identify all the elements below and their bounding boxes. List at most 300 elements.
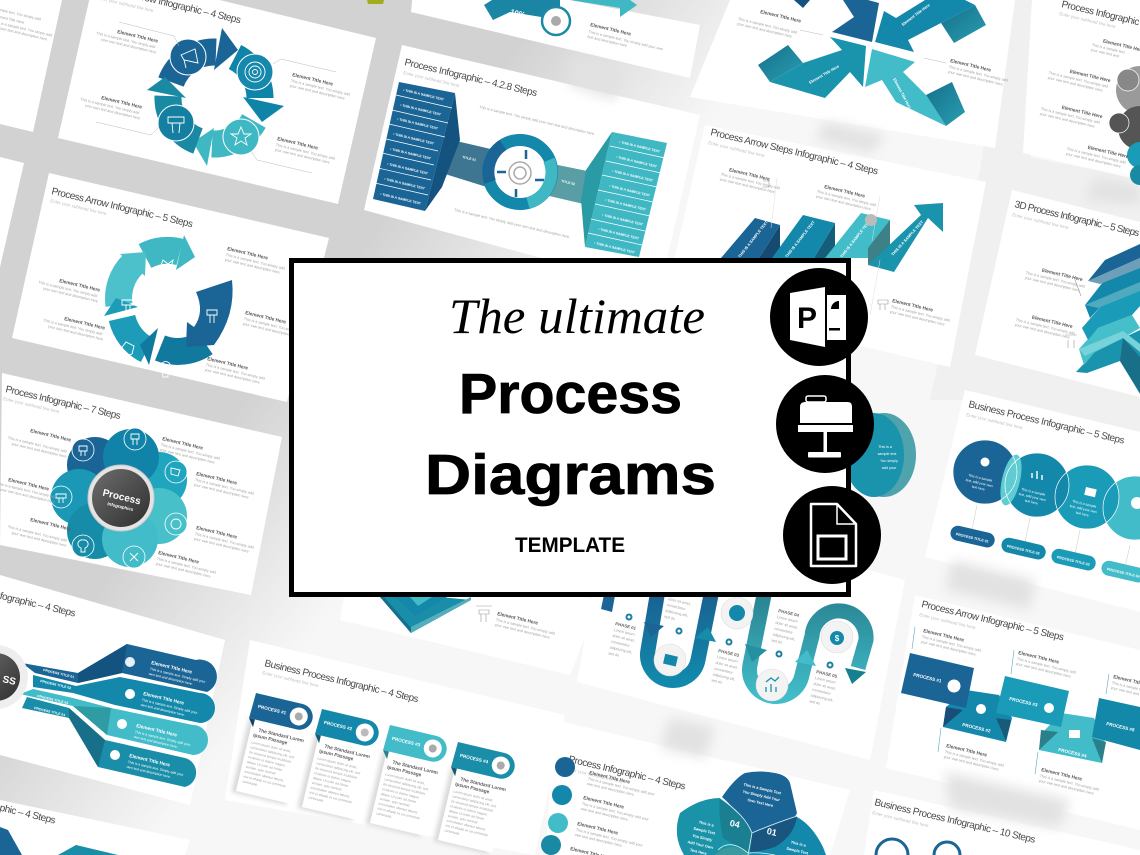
slide: 7 steps flower: This is a sample text. You simply add bbox=[7, 525, 67, 543]
captions: your own text and description here bbox=[920, 640, 976, 657]
slide: winding phases: sed do bbox=[664, 615, 675, 621]
slide: top right bbox=[1039, 0, 1140, 185]
slide: top right: Element Title Here bbox=[1069, 69, 1111, 84]
slide: winding phases: adipiscing elit, bbox=[665, 609, 688, 618]
slide: 7 steps flower: Element Title Here bbox=[8, 477, 50, 493]
slide: 3D chevrons: Element Title Here bbox=[1041, 268, 1083, 283]
pyramid fragment: Element Title Here bbox=[497, 611, 539, 627]
slide: 5 steps arrow ring: This is a sample text. You simply add bbox=[225, 253, 285, 271]
phase labels: consectetur bbox=[611, 640, 631, 648]
slide: 4.2.8 steps: • THIS IS A SAMPLE TEXT bbox=[384, 177, 426, 191]
slide: top right: your own text and description here bbox=[1047, 76, 1103, 93]
ring arrows bbox=[147, 28, 284, 166]
column 2: consequat. bbox=[308, 795, 325, 803]
slide: 4.2.8 steps: • THIS IS A SAMPLE TEXT bbox=[609, 184, 651, 198]
column 4: do eiusmod tempor incididunt bbox=[451, 799, 494, 813]
slide: process arrow 5 boxes: Process Arrow Infographic – 5 Steps bbox=[920, 599, 1065, 644]
petal icons bbox=[50, 428, 187, 568]
column 1: The Standard Lorem bbox=[258, 728, 305, 744]
slide: 5 steps arrow ring: This is a sample text. You simply add bbox=[205, 363, 265, 381]
slide: top right: Element Title Here bbox=[1087, 145, 1129, 160]
captions bbox=[920, 628, 983, 658]
title: Process Arrow Infographic – 5 Steps bbox=[50, 186, 194, 230]
slide: business 5 steps circles: text here bbox=[1075, 511, 1089, 518]
column 2 bbox=[298, 709, 381, 822]
slide: process arrow 5 boxes: PROCESS #3 bbox=[1009, 696, 1038, 708]
slide: 4.2.8 steps: • THIS IS A SAMPLE TEXT bbox=[594, 241, 636, 255]
slide: blob process: Sample Text bbox=[693, 827, 716, 836]
slide: 5 steps arrow ring: Enter your subhead line here bbox=[50, 198, 108, 216]
disk behind panel: You simply bbox=[880, 459, 898, 463]
captions bbox=[95, 25, 159, 54]
title: Process Infographic – 4.2.8 Steps bbox=[403, 57, 538, 99]
slide: winding phases: dolor sit amet, bbox=[775, 621, 798, 630]
band icons bbox=[125, 657, 135, 667]
slide: funnel 4 steps: This is a sample text. Simply add your bbox=[127, 760, 185, 777]
slide: winding phases bbox=[601, 590, 866, 708]
slide: top arrow with 10% bbox=[484, 0, 665, 56]
title: Process Infographic – 7 Steps bbox=[4, 384, 122, 422]
slide: blob process: Element Title Here bbox=[589, 770, 631, 786]
slide: 5 steps arrow ring bbox=[37, 186, 305, 386]
title pills: PROCESS TITLE 03 bbox=[1056, 555, 1090, 567]
slide: 7 steps flower: Enter your subhead line here bbox=[3, 396, 61, 414]
column 2: aliqua. Ut enim ad minim bbox=[312, 776, 349, 788]
notes: This is a sample text. You simply add your own text and description here. bbox=[479, 105, 595, 136]
slide: blob process: This is a bbox=[698, 820, 715, 828]
slide: process arrow 5 boxes: PROCESS #4 bbox=[1058, 747, 1087, 759]
slide: 4 steps ring: Element Title Here bbox=[101, 95, 143, 111]
band labels bbox=[34, 668, 75, 717]
band labels: PROCESS TITLE 02 bbox=[40, 679, 72, 690]
slide: 4 steps ring: This is a sample text. You simply add bbox=[80, 97, 140, 115]
captions: your own text and description here bbox=[101, 38, 156, 54]
slide: 7 steps flower: your own text and description here bbox=[11, 442, 67, 459]
slide: funnel 4 steps: Element Title Here bbox=[151, 660, 193, 676]
slide: blob process bbox=[541, 754, 826, 855]
slide: top right: This is a sample text. You simply add bbox=[1048, 71, 1108, 89]
slide: arrow steps: your own text and description here bbox=[815, 194, 871, 211]
slide: winding phases: $ bbox=[835, 634, 840, 643]
captions: This is a sample text. You simply add bbox=[921, 635, 981, 653]
column 1: veniam, quis nostrud bbox=[245, 765, 276, 776]
slide: winding phases: sed do bbox=[771, 638, 783, 645]
column 4: veniam, quis nostrud bbox=[447, 814, 478, 825]
slide: 7 steps flower: This is a sample text. You simply add bbox=[194, 532, 254, 550]
ring bbox=[104, 235, 233, 365]
band labels: PROCESS TITLE 04 bbox=[34, 706, 66, 717]
captions: This is a sample text. You simply add bbox=[38, 280, 98, 298]
bar labels: TITLE 01 bbox=[462, 155, 477, 162]
slide: 5 steps arrow ring: Element Title Here bbox=[245, 310, 287, 326]
slide: business 5 steps circles: text, add your own bbox=[1018, 492, 1046, 502]
slide: winding phases: dolor sit amet, bbox=[715, 661, 738, 670]
slide: 5 steps arrow ring: your own text and description here bbox=[48, 325, 103, 341]
slide: funnel 4 steps: SS bbox=[1, 674, 17, 688]
phase labels bbox=[608, 621, 638, 660]
central title panel bbox=[292, 260, 848, 594]
band labels: PROCESS TITLE 03 bbox=[37, 694, 69, 705]
slide: top arrow with 10%: text and description here bbox=[587, 35, 627, 48]
slide: 3D chevrons: Element Title Here bbox=[1031, 315, 1073, 330]
slide: 4.2.8 steps: • THIS IS A SAMPLE TEXT bbox=[390, 147, 432, 161]
column 4: nisi ut aliquip ex ea commodo bbox=[445, 823, 488, 837]
column 3: The Standard Lorem bbox=[392, 760, 439, 776]
slide: 3D chevrons: Enter your subhead line here bbox=[1012, 212, 1070, 230]
petals bbox=[67, 437, 123, 493]
slide: 4 steps ring: This is a sample text. You simply add bbox=[290, 79, 350, 97]
slide: 5 steps arrow ring: Element Title Here bbox=[227, 246, 269, 262]
slide: 7 steps flower: your own text and description here bbox=[193, 537, 249, 554]
pyramid fragment: This is a sample text. You simply add bbox=[495, 618, 555, 636]
slide: 5 steps arrow ring: This is a sample text. You simply add bbox=[43, 318, 103, 336]
slide: winding phases: PHASE 04 bbox=[778, 608, 800, 618]
slide: top right: This is a sample text. You simply add bbox=[1066, 147, 1126, 165]
slide: 3D chevrons: your own text and description here bbox=[1014, 323, 1070, 340]
rising bars bbox=[759, 225, 780, 258]
captions bbox=[719, 166, 782, 195]
step bubbles bbox=[654, 597, 853, 701]
slide: process arrow 5 boxes: This is a sample text. You simply add bbox=[944, 750, 1004, 768]
captions: Element Title Here bbox=[117, 29, 159, 45]
slide: cross arrows: Element Title Here bbox=[892, 77, 913, 110]
slide: process arrow 5 boxes: Element Title Here bbox=[1018, 650, 1060, 666]
slide: blob process: Add Your Own bbox=[687, 840, 714, 850]
slide: arrow steps: This is a sample text. You simply add bbox=[890, 305, 950, 323]
captions bbox=[37, 274, 101, 303]
path arrowheads bbox=[644, 622, 664, 637]
slide: blob process: Element Title Here bbox=[577, 821, 619, 837]
slide: blob process: This is a sample text. You simply add your bbox=[581, 802, 650, 822]
slide: winding phases: adipiscing elit, bbox=[712, 672, 736, 682]
captions: This is a sample text. You simply add bbox=[96, 31, 156, 49]
centre badge: Infographics bbox=[107, 501, 134, 512]
slide: process arrow 5 boxes: PROCESS #1 bbox=[913, 672, 942, 684]
slide: bottom left 4 steps bbox=[0, 788, 118, 855]
column 1: Lorem ipsum dolor sit amet, bbox=[251, 740, 292, 754]
column 1 bbox=[232, 693, 315, 806]
pyramid fragment bbox=[380, 597, 557, 641]
column 3: ut labore et dolore magna bbox=[382, 787, 419, 800]
slide: 4.2.8 steps: • THIS IS A SAMPLE TEXT bbox=[605, 198, 647, 212]
slide: blob process: This is a bbox=[790, 840, 807, 848]
slide: 7 steps flower: your own text and description here bbox=[159, 448, 215, 465]
slide: cross arrows bbox=[736, 0, 1010, 126]
column 1: Ipsum Passage bbox=[252, 733, 288, 747]
slide: winding phases: consectetur bbox=[774, 627, 794, 635]
slide: business 5 steps circles: text, add your own bbox=[965, 478, 993, 488]
slide: winding phases: adipiscing elit, bbox=[772, 632, 796, 642]
slide: 4.2.8 steps: • THIS IS A SAMPLE TEXT bbox=[393, 132, 435, 146]
title pills: PROCESS TITLE 02 bbox=[1006, 544, 1040, 556]
slide: arrow steps: Element Title Here bbox=[892, 298, 934, 314]
slide: 4 steps ring: your own text and description here bbox=[85, 104, 140, 120]
slide: 7 steps flower: This is a sample text. You simply add bbox=[7, 436, 67, 454]
connecting bars bbox=[445, 140, 495, 188]
phase labels: sed do bbox=[608, 651, 620, 658]
slide: top arrow with 10%: Element Title Here bbox=[590, 22, 632, 38]
slide: blob process: own text and description here. bbox=[586, 782, 635, 797]
column 2: PROCESS #2 bbox=[323, 720, 353, 731]
slide: business 5 steps circles bbox=[949, 399, 1140, 584]
ring icons bbox=[120, 260, 217, 377]
icon: Google Slides bbox=[783, 486, 881, 584]
title pills: PROCESS TITLE 01 bbox=[955, 532, 989, 544]
slide: 4.2.8 steps: • THIS IS A SAMPLE TEXT bbox=[387, 162, 429, 176]
phase labels: adipiscing elit, bbox=[609, 645, 633, 655]
column 3: consectetur adipiscing elit, sed bbox=[384, 777, 429, 791]
slide: 7 steps flower: Element Title Here bbox=[162, 436, 204, 452]
slide: funnel 4 steps: This is a sample text. Simply add your bbox=[149, 667, 207, 684]
slide: winding phases: Lorem ipsum bbox=[716, 655, 738, 664]
column 3: Ipsum Passage bbox=[386, 765, 422, 779]
column 2: do eiusmod tempor incididunt bbox=[315, 766, 358, 780]
script heading: The ultimate bbox=[449, 288, 705, 344]
slide: blob process: You Simply Add Your bbox=[742, 790, 781, 802]
slide: 7 steps flower: your own text and description here bbox=[0, 487, 55, 504]
slide: 5 steps arrow ring: your own text and description here bbox=[242, 322, 298, 339]
slide: arrow steps: This is a sample text. You simply add bbox=[817, 190, 876, 207]
slide: winding phases: Lorem ipsum bbox=[776, 615, 798, 624]
slide: funnel 4 steps: own text and description here. bbox=[148, 672, 193, 686]
top yellow fragment bbox=[367, 0, 384, 4]
slide: blob process: Element Title Here bbox=[583, 795, 625, 811]
column 2: The Standard Lorem bbox=[324, 744, 371, 760]
slide: top right: This is a sample text. You simply add bbox=[1040, 107, 1100, 125]
markers bbox=[626, 614, 832, 668]
slide: process arrow 5 boxes: This is a sample text. You simply add bbox=[1039, 774, 1099, 792]
column 2: nisi ut aliquip ex ea commodo bbox=[309, 790, 352, 804]
slide: 7 steps flower: Element Title Here bbox=[30, 517, 72, 533]
slide: 5 steps arrow ring: Element Title Here bbox=[207, 356, 249, 372]
slide: business 10 steps: Business Process Infographic – 10 Steps bbox=[873, 797, 1036, 846]
main heading line 1: Process bbox=[459, 362, 682, 426]
slide: cross arrows: This is a sample text. You simply add bbox=[948, 65, 1008, 83]
slide: cross arrows: your own text and description here bbox=[736, 22, 792, 39]
slide: cross arrows: Element Title Here bbox=[760, 9, 802, 25]
slide: arrow steps: Enter your subhead line here bbox=[708, 140, 766, 158]
slide: blob process: This is a sample text. You simply add your bbox=[587, 777, 656, 797]
disk behind panel: add your bbox=[882, 466, 897, 470]
column 4: Lorem ipsum dolor sit amet, bbox=[453, 789, 494, 803]
phase labels: PHASE 01 bbox=[615, 621, 637, 631]
slide: arrow steps: THIS IS A SAMPLE TEXT bbox=[890, 219, 925, 257]
slide: winding phases: dolor sit amet, bbox=[668, 597, 691, 606]
column 2: Lorem ipsum dolor sit amet, bbox=[317, 756, 358, 770]
slide: 7 steps flower: This is a sample text. You simply add bbox=[194, 478, 254, 496]
slide: arrow steps: THIS IS A SAMPLE TEXT bbox=[737, 219, 769, 259]
title pills bbox=[949, 524, 1140, 584]
slide: 3D chevrons: your own text and description here bbox=[1024, 276, 1080, 293]
slide: business 4 steps: Enter your subhead line here bbox=[262, 670, 320, 688]
column 3: Lorem ipsum dolor sit amet, bbox=[385, 772, 426, 786]
column 4 bbox=[434, 742, 517, 855]
slide: winding phases: consectetur bbox=[812, 688, 832, 696]
column 4: ut labore et dolore magna bbox=[450, 804, 487, 817]
slide: 4.2.8 steps: This is a sample text. You simply add your own text and description here. bbox=[454, 208, 570, 239]
icon circles bbox=[158, 39, 273, 155]
slide: 4 steps ring: your own text and description here bbox=[274, 148, 330, 165]
right panel bbox=[581, 132, 612, 247]
disk behind panel: sample text bbox=[878, 452, 896, 456]
column 1: consectetur adipiscing elit, sed bbox=[250, 745, 295, 759]
column 4: consectetur adipiscing elit, sed bbox=[452, 794, 497, 808]
column 4: Ipsum Passage bbox=[454, 782, 490, 796]
slide: 4 steps ring: Element Title Here bbox=[292, 72, 334, 88]
captions: your own text and description here bbox=[43, 287, 98, 303]
slide: blob process: This is a sample text. You simply add your bbox=[575, 828, 644, 848]
slide: 4.2.8 steps: • THIS IS A SAMPLE TEXT bbox=[403, 88, 445, 102]
slide: blob process: Process Infographic – 4 Steps bbox=[567, 754, 687, 793]
centre badge: Process bbox=[101, 488, 142, 507]
boxes bbox=[943, 690, 1012, 742]
captions: Element Title Here bbox=[30, 428, 72, 444]
main heading line 2: Diagrams bbox=[425, 443, 716, 507]
slide: process arrow 5 boxes: your own text and bbox=[1110, 686, 1139, 696]
slide: business 5 steps circles: Enter your subhead line here bbox=[966, 412, 1024, 430]
winding road bbox=[648, 590, 712, 680]
slide: blob process: 04 bbox=[729, 818, 741, 830]
disk behind panel bbox=[844, 413, 916, 497]
icon: Keynote bbox=[776, 375, 874, 473]
slide: arrow steps: THIS IS A SAMPLE TEXT bbox=[784, 219, 816, 259]
slide: top right: your own text and description here bbox=[1065, 152, 1121, 169]
slide: process arrow 5 boxes: Element Title Here bbox=[1041, 767, 1083, 783]
disk behind panel: This is a bbox=[878, 445, 893, 449]
slide: 7 steps flower: This is a sample text. You simply add bbox=[160, 443, 220, 461]
left panel bbox=[425, 93, 460, 211]
slide: funnel 4 steps: own text and description here. bbox=[133, 735, 178, 749]
column 2: consectetur adipiscing elit, sed bbox=[316, 761, 361, 775]
slide: funnel 4 steps: Element Title Here bbox=[136, 723, 178, 739]
slide: top right: your own text and bbox=[1090, 48, 1119, 58]
column 3 bbox=[366, 725, 449, 838]
slide: 4.2.8 steps: • THIS IS A SAMPLE TEXT bbox=[616, 155, 658, 169]
column 1: exercitation ullamco laboris bbox=[244, 770, 284, 783]
slide: 4.2.8 steps: • THIS IS A SAMPLE TEXT bbox=[612, 169, 654, 183]
column 2: Ipsum Passage bbox=[318, 749, 354, 763]
slide: funnel 4 steps bbox=[0, 581, 217, 787]
slide: business 5 steps circles: text, add your own bbox=[1069, 504, 1097, 514]
slide: winding phases: sed do bbox=[809, 699, 821, 706]
column 3: PROCESS #3 bbox=[391, 736, 421, 747]
column 1: aliqua. Ut enim ad minim bbox=[246, 760, 283, 772]
slide: blob process: This is a Sample Text bbox=[743, 783, 782, 796]
captions: Element Title Here bbox=[59, 278, 101, 294]
column 4: PROCESS #4 bbox=[459, 753, 489, 764]
slide: 4.2.8 steps: • THIS IS A SAMPLE TEXT bbox=[602, 213, 644, 227]
title: Process Arrow Steps Infographic – 4 Steps bbox=[709, 127, 879, 177]
slide: 4 steps ring bbox=[79, 0, 352, 173]
column 4: consequat. bbox=[444, 828, 461, 836]
captions: Element Title Here bbox=[728, 167, 771, 183]
slide: process arrow 5 boxes bbox=[901, 599, 1140, 797]
icon: PowerPoint bbox=[770, 268, 868, 366]
slide: funnel 4 steps: Element Title Here bbox=[129, 753, 171, 769]
slide: 5 steps arrow ring: your own text and description here bbox=[204, 368, 260, 385]
slide: blob process: Enter your subhead line here bbox=[566, 766, 624, 784]
soft shadows bbox=[570, 55, 1140, 828]
slide: 7 steps flower: your own text and description here bbox=[155, 562, 211, 579]
column 4: The Standard Lorem bbox=[460, 777, 507, 793]
slide: 7 steps flower: Element Title Here bbox=[196, 471, 238, 487]
slide: 4.2.8 steps: TITLE 02 bbox=[561, 179, 576, 186]
column 3: do eiusmod tempor incididunt bbox=[383, 782, 426, 796]
slide: 7 steps flower: your own text and description here bbox=[11, 531, 67, 548]
slide: blob process: You Simply bbox=[692, 834, 713, 843]
slide: process arrow 5 boxes: your own text and description here bbox=[1038, 779, 1094, 796]
list icons bbox=[555, 757, 575, 777]
chevron stack bbox=[1076, 244, 1140, 394]
column 2: veniam, quis nostrud bbox=[311, 781, 342, 792]
slide: 3D chevrons: This is a sample text. You simply add bbox=[1025, 271, 1085, 289]
slide: top arrow with 10%: This is a sample text. You simply add your own bbox=[588, 30, 663, 51]
column 3: nisi ut aliquip ex ea commodo bbox=[377, 806, 420, 820]
column 2: ut labore et dolore magna bbox=[314, 771, 351, 784]
slide: cross arrows: Element Title Here bbox=[950, 58, 992, 74]
funnel bands bbox=[22, 644, 217, 692]
pyramid fragment: your own text and description here bbox=[494, 623, 550, 640]
slide: business 4 steps bbox=[232, 658, 517, 855]
slide: top right: This is a sample text. bbox=[1091, 43, 1126, 55]
slide: 3D chevrons bbox=[1012, 199, 1140, 394]
slide: cross arrows: your own text and description here bbox=[947, 70, 1003, 87]
column 4: exercitation ullamco laboris bbox=[446, 819, 486, 832]
slide: process arrow 5 boxes: This is a sample text. You simply add bbox=[1016, 657, 1076, 675]
slide: winding phases: sed do bbox=[711, 678, 723, 685]
slide: top arrow with 10%: 10% bbox=[510, 7, 527, 19]
slide: 7 steps flower: Element Title Here bbox=[158, 550, 200, 566]
slide: 3D chevrons: 3D Process Infographic – 5 Steps bbox=[1013, 199, 1140, 239]
column 3: consequat. bbox=[376, 811, 393, 819]
slide: business 4 steps: Business Process Infographic – 4 Steps bbox=[263, 658, 420, 705]
slide: winding phases: Lorem ipsum bbox=[814, 676, 836, 685]
slide: business 10 steps: Enter your subhead line here bbox=[872, 810, 930, 828]
slide: top right: Enter your subhead line here bbox=[1059, 11, 1117, 29]
slide: business 5 steps circles: This is a sample bbox=[1021, 487, 1046, 497]
slide: winding phases: adipiscing elit, bbox=[810, 693, 834, 703]
column 3: exercitation ullamco laboris bbox=[378, 802, 418, 815]
slide: process arrow 5 boxes: Element Title Here bbox=[946, 743, 988, 759]
phase labels: dolor sit amet, bbox=[612, 634, 635, 643]
centre badge bbox=[88, 465, 154, 531]
slide: arrow steps: your own text and description here bbox=[889, 310, 945, 327]
slide: 3D chevrons: This is a sample text. You simply add bbox=[1015, 318, 1075, 336]
slide: process arrow 5 boxes: Enter your subhead line here bbox=[919, 612, 977, 630]
slide: winding phases: PHASE 05 bbox=[816, 669, 838, 679]
band labels: PROCESS TITLE 01 bbox=[43, 668, 75, 679]
slide: business 5 steps circles: text here bbox=[971, 485, 985, 492]
slide: 7 steps flower: Element Title Here bbox=[196, 525, 238, 541]
slide: 5 steps arrow ring: Element Title Here bbox=[64, 316, 106, 332]
slide: 4.2.8 steps bbox=[373, 57, 667, 257]
captions: This is a sample text. You simply add bbox=[720, 172, 780, 190]
slide: 7 steps flower: your own text and description here bbox=[193, 483, 249, 500]
slide: business 5 steps circles: This is a sample bbox=[968, 473, 993, 483]
slide: funnel 4 steps: own text and description here. bbox=[140, 703, 185, 717]
slide: blob process: own text and description here. bbox=[574, 833, 623, 848]
icon: PowerPoint: P bbox=[797, 302, 817, 335]
slide: process arrow 5 boxes: your own text and description here bbox=[1015, 662, 1071, 679]
column 2: exercitation ullamco laboris bbox=[310, 786, 350, 799]
slide: process arrow 5 boxes: PROCESS #5 bbox=[1106, 721, 1135, 733]
slide: 7 steps flower: This is a sample text. You simply add bbox=[156, 557, 216, 575]
column 1: do eiusmod tempor incididunt bbox=[249, 750, 292, 764]
slide: arrow steps: Element Title Here bbox=[824, 184, 866, 200]
title pills: PROCESS TITLE 04 bbox=[1106, 567, 1140, 579]
column 1: ut labore et dolore magna bbox=[248, 755, 285, 768]
slide: 4.2.8 steps: • THIS IS A SAMPLE TEXT bbox=[619, 140, 661, 154]
